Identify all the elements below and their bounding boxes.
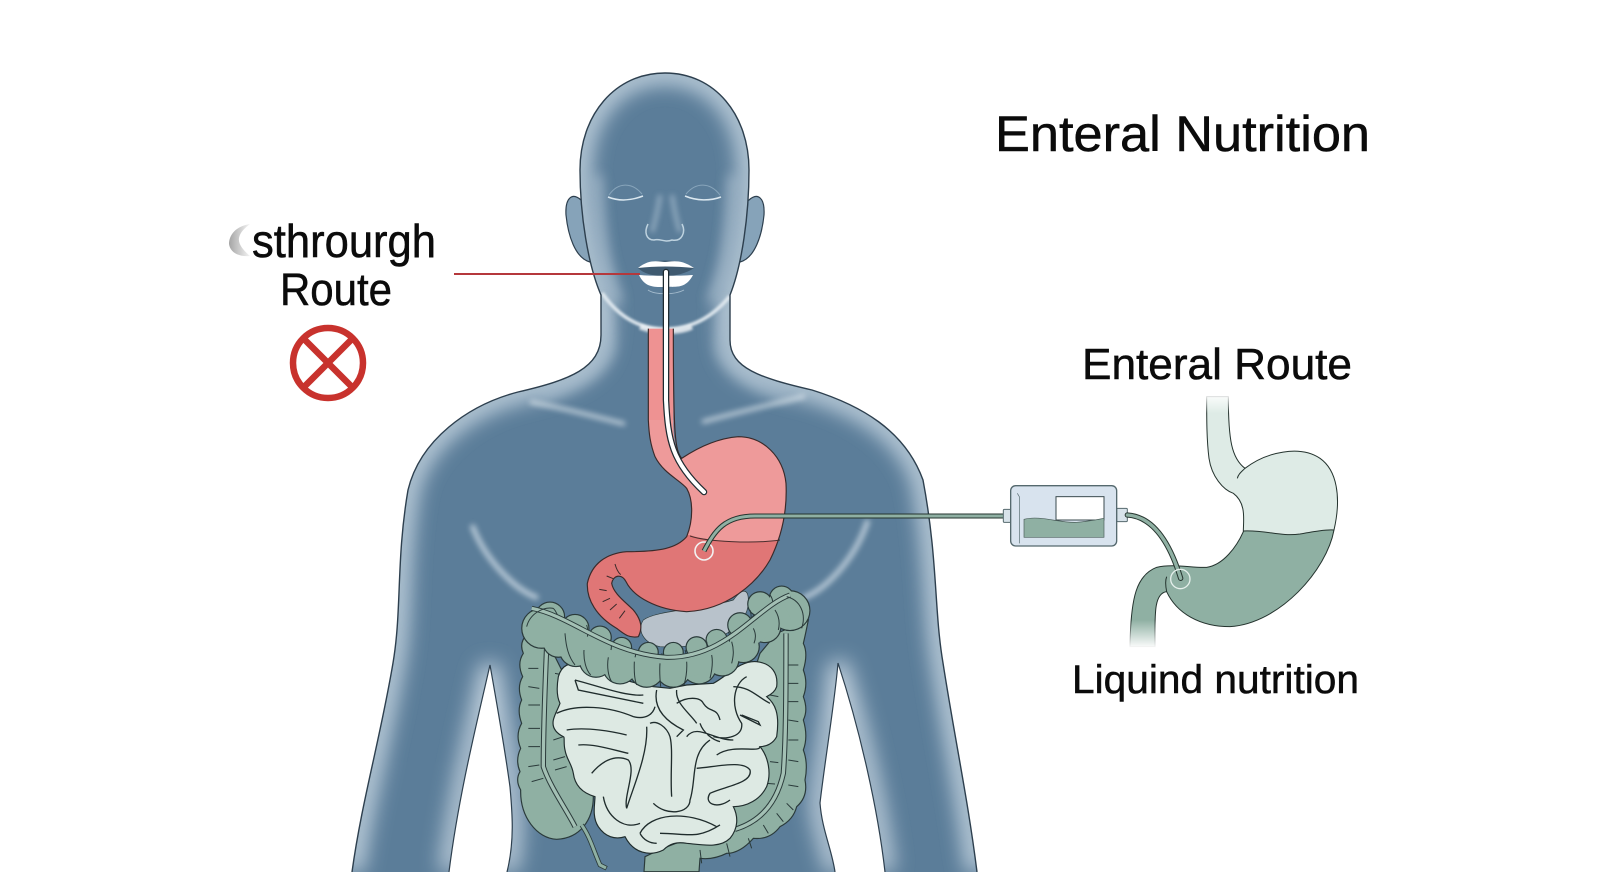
nose	[646, 224, 684, 241]
oesophagus upper section	[648, 329, 673, 423]
tube to stomach	[1127, 515, 1181, 578]
body outline	[352, 73, 977, 872]
colon side sections	[518, 620, 808, 872]
gaps between arms and body	[449, 663, 885, 872]
fade at oesophagus	[1203, 393, 1232, 413]
oesophagus, stomach and bowel	[518, 329, 809, 872]
left connector	[1003, 509, 1011, 522]
notch	[1166, 468, 1245, 592]
human figure	[352, 73, 977, 872]
liquid level	[1243, 530, 1334, 535]
mouth	[638, 260, 694, 276]
ears	[566, 196, 764, 262]
label: enteral route: Enteral Route	[1082, 340, 1352, 389]
gastric access ring	[695, 542, 713, 560]
pancreas	[641, 591, 748, 647]
damaged glyph smudge	[229, 224, 250, 256]
transverse colon	[522, 587, 809, 687]
label: liquid nutrition: Liquind nutrition	[1072, 658, 1359, 702]
pointer line to mouth	[454, 273, 640, 275]
display window	[1056, 497, 1104, 520]
pump side mark	[1017, 493, 1019, 543]
right connector	[1117, 508, 1127, 522]
fade at duodenum	[1127, 620, 1158, 648]
enteral tube	[704, 516, 1005, 551]
small intestine	[553, 662, 778, 853]
torso and head silhouette	[352, 73, 977, 872]
stomach upper	[1130, 397, 1338, 647]
side stomach diagram	[1127, 393, 1338, 648]
soft inner glow	[352, 73, 977, 872]
label: sthrourgh route: sthrourgh	[252, 215, 436, 267]
feeding pump	[1003, 486, 1190, 589]
liquid nutrition in stomach	[1130, 530, 1334, 646]
oral feeding tube	[666, 272, 704, 492]
access ring	[1171, 569, 1190, 589]
label: route: Route	[280, 264, 392, 315]
liquid	[1024, 518, 1104, 537]
pump casing	[1011, 486, 1117, 546]
stomach	[587, 329, 786, 637]
eyes	[608, 196, 721, 200]
outline	[1130, 397, 1338, 647]
face	[608, 185, 721, 294]
icon: red crossed circle	[293, 328, 363, 398]
title: Enteral Nutrition	[995, 106, 1370, 162]
